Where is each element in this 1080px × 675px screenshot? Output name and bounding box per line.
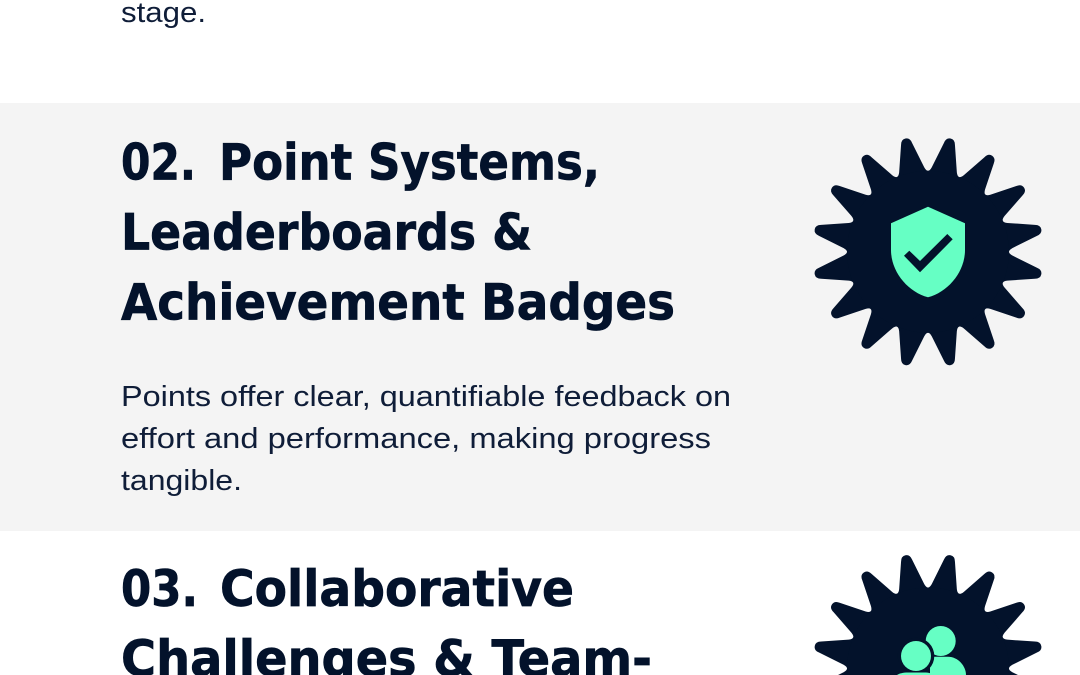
icon: team badge	[812, 552, 1044, 675]
heading: section 03: 03.	[121, 560, 198, 618]
text: section 02 body: tangible.	[121, 465, 242, 497]
panel: section 03	[0, 531, 1080, 675]
heading: section 02: Leaderboards &	[121, 204, 532, 262]
icon: shield badge	[812, 135, 1044, 368]
heading: section 02: Achievement Badges	[121, 274, 675, 332]
heading: section 02	[121, 134, 675, 332]
heading: section 02: 02.	[121, 134, 196, 192]
heading: section 03: Collaborative	[220, 560, 574, 618]
text: section 02 body	[121, 381, 731, 497]
heading: section 02: Point Systems,	[219, 134, 600, 192]
panel: section 01 ending	[0, 0, 1080, 103]
heading: section 03	[121, 560, 652, 675]
text: section 02 body: effort and performance, making progress	[121, 423, 711, 455]
text: section 02 body: Points offer clear, quantifiable feedback on	[121, 381, 731, 413]
panel: section 02	[0, 103, 1080, 531]
